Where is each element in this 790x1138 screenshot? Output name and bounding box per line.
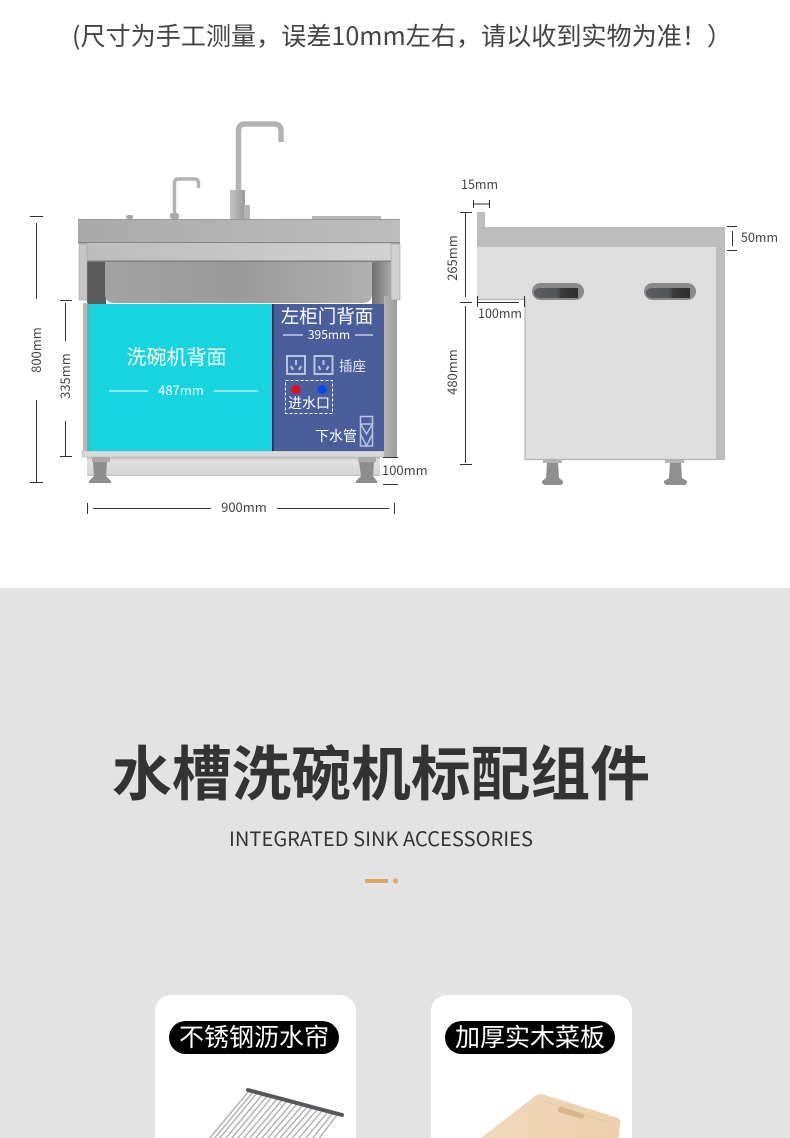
card: drying rack	[155, 995, 356, 1138]
panel: left door back: 左柜门背面	[281, 303, 373, 329]
drying rack image	[204, 1090, 342, 1138]
right edge strip	[716, 247, 725, 460]
cabinet side body	[477, 247, 716, 459]
dimension: 15mm	[461, 174, 498, 208]
cutting board image	[472, 1094, 620, 1138]
dimension: 15mm: 15mm	[461, 174, 498, 193]
panel: left door back	[272, 303, 384, 451]
panel: dishwasher back	[87, 304, 272, 451]
dimension: 480mm: 480mm	[442, 349, 461, 395]
dimension: 900mm: 900mm	[221, 497, 267, 516]
drain pipe label: 下水管	[315, 426, 357, 446]
panel: dishwasher back: 487mm	[158, 380, 204, 399]
accent mark	[365, 878, 398, 884]
sink legs	[79, 244, 400, 300]
icon: socket 2	[314, 356, 332, 374]
right foot	[356, 457, 377, 483]
water inlet box	[286, 380, 332, 414]
icon: socket 1	[287, 356, 305, 374]
dimension: 265mm	[442, 212, 472, 302]
panel: dishwasher back: 洗碗机背面	[126, 341, 226, 370]
dimension: 50mm: 50mm	[741, 227, 778, 246]
dimension: 100mm foot: 100mm	[382, 460, 428, 479]
dimension: 480mm	[442, 306, 472, 464]
socket label: 插座	[339, 355, 366, 375]
dimension: 900mm	[88, 497, 394, 516]
panel: left door back: 395mm	[308, 326, 350, 343]
main faucet	[230, 124, 281, 219]
dimension: 100mm notch: 100mm	[478, 303, 522, 322]
dimension: 100mm notch	[478, 296, 524, 322]
left foot	[89, 457, 111, 483]
handle right	[644, 283, 696, 300]
water inlet box: 进水口	[288, 393, 330, 413]
handle left	[532, 283, 584, 300]
foot left	[542, 459, 563, 485]
small faucet	[126, 179, 198, 219]
basin	[87, 244, 391, 304]
side view: cabinet profile	[477, 212, 725, 485]
dimension: 800mm: 800mm	[26, 327, 45, 373]
backsplash and top band	[477, 212, 725, 247]
cabinet frame	[82, 296, 397, 476]
label pill: 加厚实木菜板	[455, 1018, 605, 1054]
dimension: 335mm	[55, 300, 74, 456]
foot right	[664, 459, 687, 485]
dimension: 50mm	[727, 226, 778, 250]
dimension: 800mm	[26, 216, 45, 482]
top note text: (尺寸为手工测量，误差10mm左右，请以收到实物为准！）	[72, 17, 732, 53]
label pill: 不锈钢沥水帘	[179, 1018, 329, 1054]
dimension: 335mm: 335mm	[55, 353, 74, 399]
icon: drain pipe	[360, 416, 372, 446]
front view: sink cabinet drawing	[78, 124, 400, 483]
dimension: 265mm: 265mm	[442, 235, 461, 281]
card: cutting board	[431, 995, 632, 1138]
subheading: INTEGRATED SINK ACCESSORIES	[229, 823, 533, 852]
heading: 水槽洗碗机标配组件	[112, 727, 650, 812]
panel: accessories background	[0, 588, 790, 1138]
countertop	[78, 216, 400, 244]
